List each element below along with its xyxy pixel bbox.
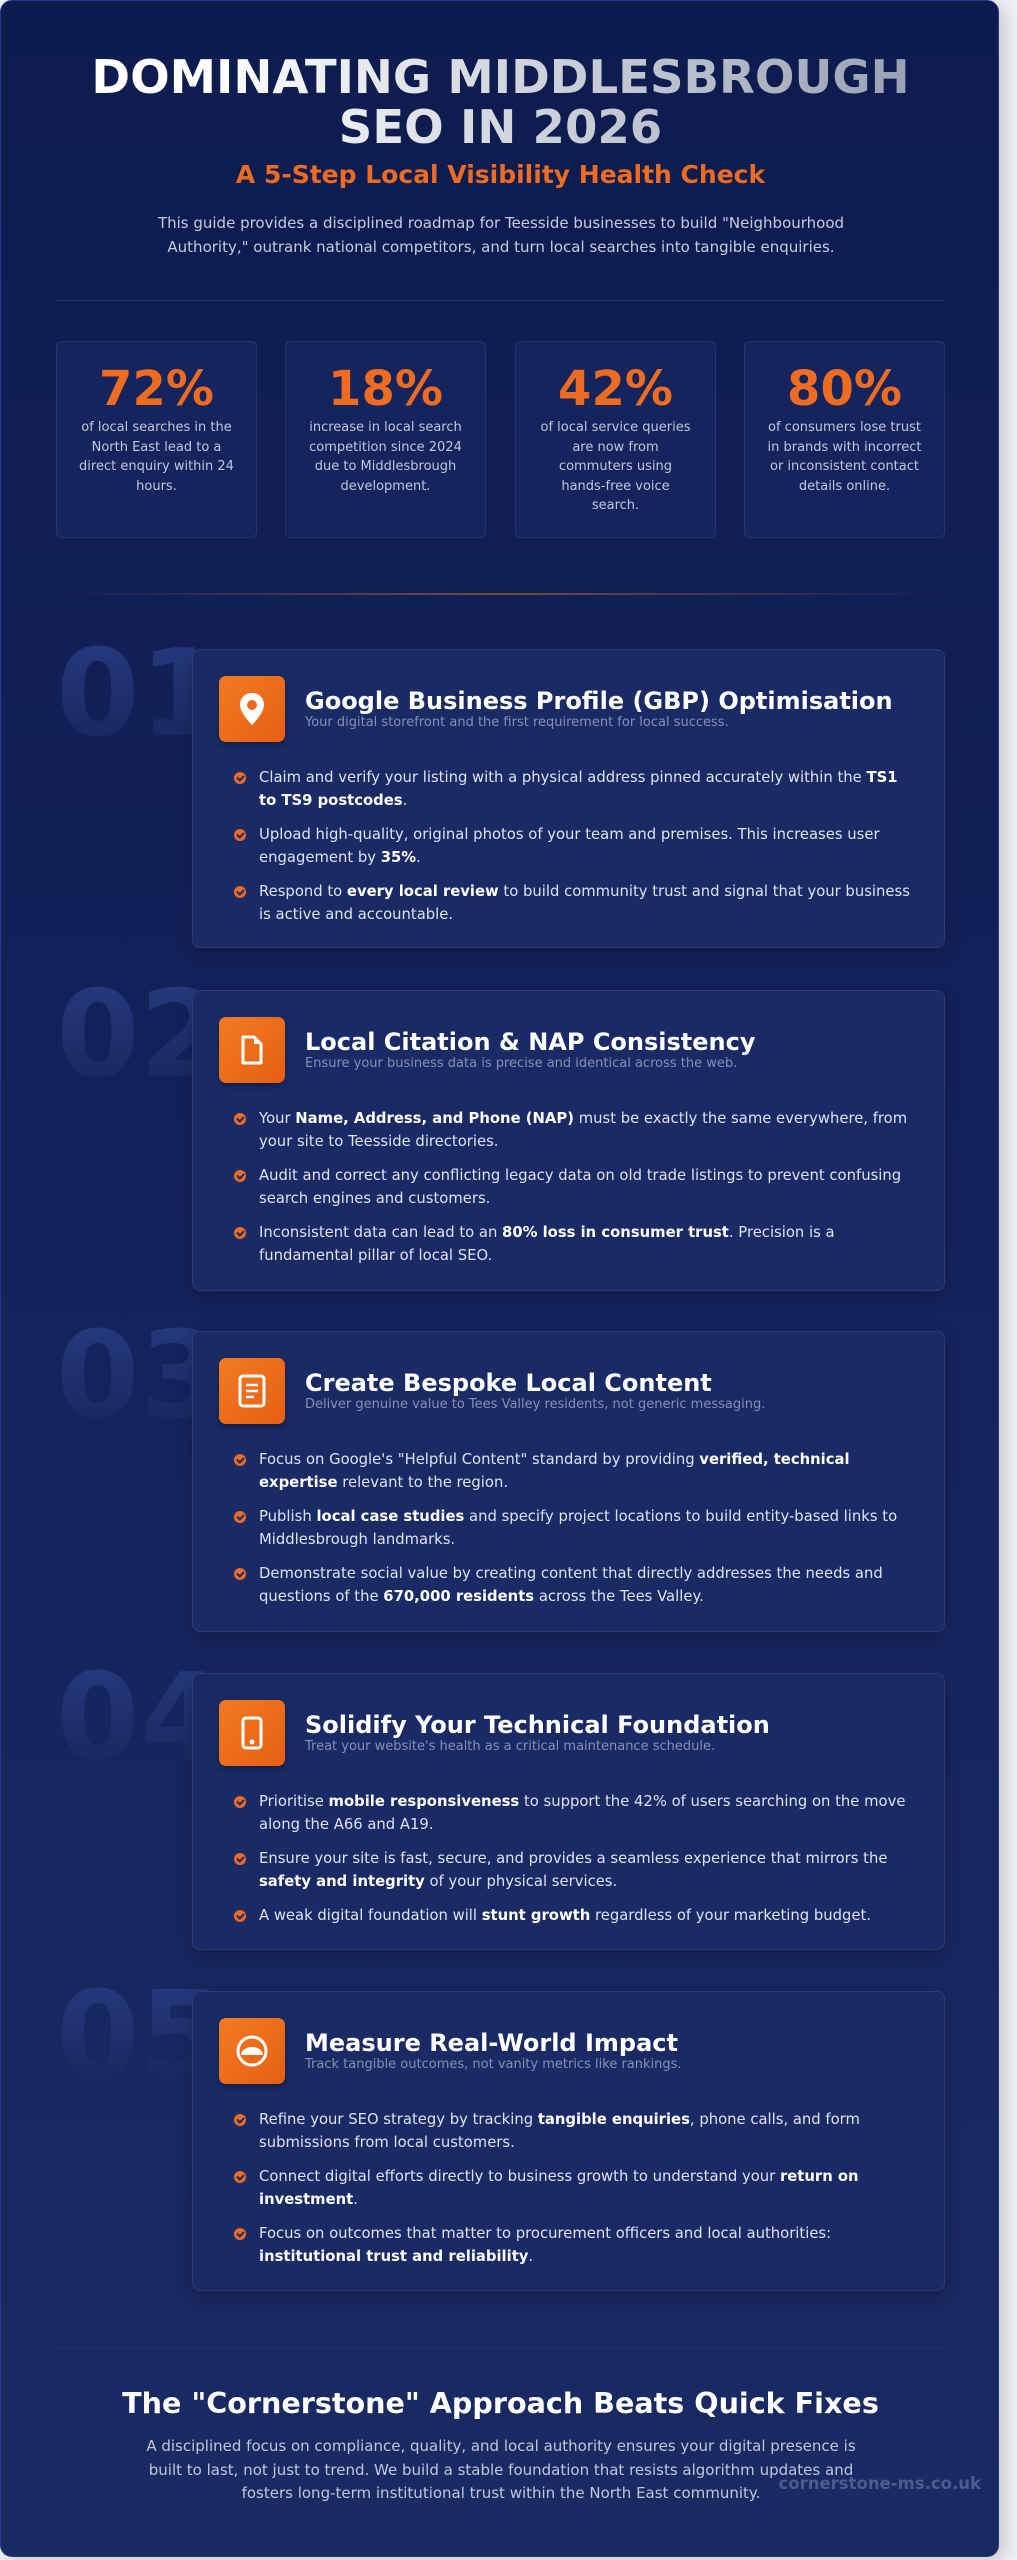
stat: 18%: 18%: [328, 361, 443, 417]
card: step 2 NAP: [192, 990, 945, 1291]
stat: 80%: 80%: [787, 361, 902, 417]
bullets 5: Focus on outcomes that matter to procurement officers and local authorities: institutional trust and reliability.: [259, 2225, 831, 2265]
step number 05: 05: [56, 1967, 223, 2106]
website link: cornerstone-ms.co.uk: [778, 2474, 981, 2493]
bullets 1: Respond to every local review to build community trust and signal that your business is active and accountable.: [259, 883, 910, 923]
card header 3: [217, 1358, 765, 1429]
icon: tablet: [219, 1700, 285, 1766]
footer heading: The "Cornerstone" Approach Beats Quick Fixes: [122, 2386, 879, 2420]
step number 03: 03: [56, 1307, 223, 1446]
icon: file: [219, 1017, 285, 1083]
card header 4: Treat your website's health as a critical maintenance schedule.: [305, 1739, 715, 1754]
stat: 72%: [56, 341, 257, 538]
stat: 42%: 42%: [558, 361, 673, 417]
bullets 1: Upload high-quality, original photos of your team and premises. This increases user engagement by 35%.: [259, 826, 880, 866]
title: SEO IN 2026: [339, 100, 662, 154]
stat: 42%: of local service queries are now from commuters using hands-free voice search.: [540, 420, 690, 513]
card header 2: Local Citation & NAP Consistency: [305, 1028, 756, 1056]
stat: 42%: [515, 341, 716, 538]
bullets 2: Your Name, Address, and Phone (NAP) must be exactly the same everywhere, from your site to Teesside directories.: [259, 1110, 907, 1150]
step number 02: 02: [56, 966, 223, 1105]
footer text: A disciplined focus on compliance, quality, and local authority ensures your digital presence is built to last, not just to trend. We build a stable foundation that resists algorithm updates and fosters long-term institutional trust within the North East community.: [146, 2437, 856, 2502]
bullets 3: [234, 1451, 897, 1605]
card header 3: Deliver genuine value to Tees Valley residents, not generic messaging.: [305, 1397, 765, 1412]
stat: 18%: [285, 341, 486, 538]
card header 1: Your digital storefront and the first requirement for local success.: [305, 715, 729, 730]
bullets 2: [234, 1110, 907, 1264]
title: DOMINATING MIDDLESBROUGH: [91, 50, 910, 104]
stat: 72%: of local searches in the North East lead to a direct enquiry within 24 hours.: [79, 420, 234, 494]
bullets 5: [234, 2111, 860, 2265]
card: step 4 technical: [192, 1673, 945, 1950]
card: step 5 impact: [192, 1991, 945, 2291]
card header 4: Solidify Your Technical Foundation: [305, 1711, 770, 1739]
icon: map pin: [219, 676, 285, 742]
card header 2: Ensure your business data is precise and identical across the web.: [305, 1056, 737, 1071]
bullets 4: Prioritise mobile responsiveness to support the 42% of users searching on the move along the A66 and A19.: [259, 1793, 905, 1833]
icon: document: [219, 1358, 285, 1424]
bullets 2: Inconsistent data can lead to an 80% loss in consumer trust. Precision is a fundamental pillar of local SEO.: [259, 1224, 835, 1264]
stat: 80%: [744, 341, 945, 538]
card header 5: Measure Real-World Impact: [305, 2029, 678, 2057]
stat: 18%: increase in local search competition since 2024 due to Middlesbrough development.: [309, 420, 462, 494]
subtitle: A 5-Step Local Visibility Health Check: [236, 160, 765, 189]
card: step 3 content: [192, 1331, 945, 1632]
bullets 3: Focus on Google's "Helpful Content" standard by providing verified, technical expertise relevant to the region.: [259, 1451, 850, 1491]
card header 5: Track tangible outcomes, not vanity metrics like rankings.: [305, 2057, 682, 2072]
bullets 3: Demonstrate social value by creating content that directly addresses the needs and questions of the 670,000 residents across the Tees Valley.: [259, 1565, 883, 1605]
bullets 3: Publish local case studies and specify project locations to build entity-based links to Middlesbrough landmarks.: [259, 1508, 897, 1548]
bullets 4: Ensure your site is fast, secure, and provides a seamless experience that mirrors the safety and integrity of your physical services.: [259, 1850, 887, 1890]
bullets 5: Refine your SEO strategy by tracking tangible enquiries, phone calls, and form submissions from local customers.: [259, 2111, 860, 2151]
step number 01: 01: [56, 625, 223, 764]
card header 3: Create Bespoke Local Content: [305, 1369, 712, 1397]
step number 04: 04: [56, 1649, 223, 1788]
card header 2: [217, 1017, 756, 1088]
stat: 72%: 72%: [99, 361, 214, 417]
bullets 1: Claim and verify your listing with a physical address pinned accurately within the TS1 to TS9 postcodes.: [259, 769, 898, 809]
bullets 2: Audit and correct any conflicting legacy data on old trade listings to prevent confusing search engines and customers.: [259, 1167, 901, 1207]
stat: 80%: of consumers lose trust in brands with incorrect or inconsistent contact details online.: [767, 420, 922, 494]
card header 4: [217, 1700, 770, 1771]
title: [1, 52, 1000, 152]
intro text: This guide provides a disciplined roadmap for Teesside businesses to build "Neighbourhood Authority," outrank national competitors, and turn local searches into tangible enquiries.: [158, 214, 844, 256]
icon: gauge: [219, 2018, 285, 2084]
card header 1: Google Business Profile (GBP) Optimisation: [305, 687, 893, 715]
bullets 1: [234, 769, 910, 923]
card header 1: [217, 676, 893, 747]
card: step 1 GBP: [192, 649, 945, 948]
bullets 5: Connect digital efforts directly to business growth to understand your return on investment.: [259, 2168, 859, 2208]
bullets 4: [234, 1793, 905, 1924]
bullets 4: A weak digital foundation will stunt growth regardless of your marketing budget.: [259, 1907, 871, 1924]
card header 5: [217, 2018, 682, 2089]
